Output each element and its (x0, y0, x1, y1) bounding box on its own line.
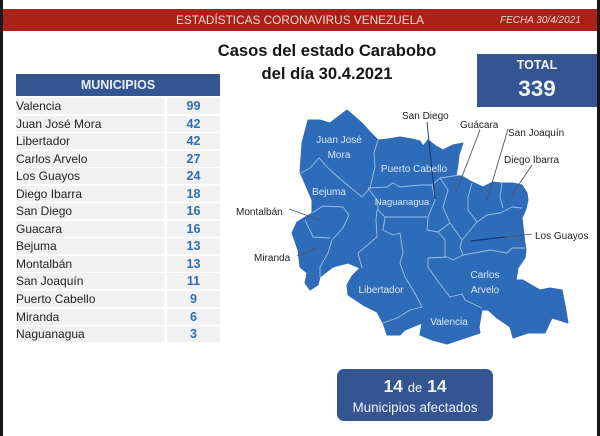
map labels inside (312, 135, 500, 328)
row: Guacara: Guacara (16, 222, 62, 236)
map labels outside: San Diego (402, 111, 449, 122)
row: San Diego: San Diego (16, 204, 72, 218)
row: Valencia: Valencia (16, 99, 61, 113)
row: San Diego: 16 (187, 204, 200, 218)
row: Libertador (16, 133, 220, 149)
row: Puerto Cabello: Puerto Cabello (16, 292, 95, 306)
map labels inside: Libertador (358, 285, 404, 296)
row: Naguanagua: Naguanagua (16, 327, 85, 341)
header title: ESTADÍSTICAS CORONAVIRUS VENEZUELA (176, 13, 424, 27)
row: Diego Ibarra (16, 186, 220, 202)
table heading: MUNICIPIOS (81, 78, 155, 92)
map labels inside: Valencia (430, 317, 468, 328)
map labels outside: San Joaquín (508, 128, 564, 139)
leader lines (289, 122, 532, 256)
row: Valencia: 99 (187, 99, 200, 113)
state silhouette (292, 110, 568, 344)
row: Juan José Mora: Juan José Mora (16, 116, 101, 130)
callout count: 14 de 14 (383, 376, 447, 396)
row: Carlos Arvelo (16, 151, 220, 167)
row: Valencia (16, 98, 220, 114)
row: Naguanagua: 3 (190, 327, 197, 341)
row: San Joaquín: 11 (187, 274, 200, 288)
map labels outside: Guácara (460, 120, 499, 131)
row: Diego Ibarra: Diego Ibarra (16, 187, 82, 201)
municipal borders (301, 140, 525, 323)
map labels inside: Bejuma (312, 187, 346, 198)
map labels inside: Naguanagua (375, 197, 430, 208)
total label: TOTAL (517, 58, 557, 72)
row: Puerto Cabello: 9 (190, 292, 197, 306)
row: Guacara: 16 (187, 222, 200, 236)
row: Libertador: 42 (187, 134, 200, 148)
row: Miranda: Miranda (16, 310, 59, 324)
map labels inside: Carlos (471, 270, 499, 281)
row: Guacara (16, 221, 220, 237)
row: Montalbán (16, 256, 220, 272)
Los Guayos pointer (471, 237, 505, 241)
map labels outside: Diego Ibarra (504, 155, 559, 166)
row: Diego Ibarra: 18 (187, 187, 200, 201)
row: Bejuma: Bejuma (16, 239, 57, 253)
title: del día 30.4.2021 (262, 64, 392, 83)
row: Carlos Arvelo: Carlos Arvelo (16, 152, 87, 166)
map labels inside: Mora (328, 150, 351, 161)
row: San Joaquín (16, 273, 220, 289)
map labels outside: Los Guayos (535, 231, 588, 242)
row: Puerto Cabello (16, 291, 220, 307)
map labels outside (236, 111, 588, 264)
row: Montalbán: 13 (187, 257, 200, 271)
row: Miranda: 6 (190, 310, 197, 324)
row: Naguanagua (16, 326, 220, 342)
map labels inside: Juan José (316, 135, 362, 146)
row: Juan José Mora: 42 (187, 116, 200, 130)
map labels inside: Arvelo (471, 285, 500, 296)
map labels outside: Montalbán (236, 207, 283, 218)
total box (477, 54, 597, 107)
row: Carlos Arvelo: 27 (187, 152, 200, 166)
row: San Joaquín: San Joaquín (16, 274, 83, 288)
callout caption: Municipios afectados (352, 400, 478, 415)
row: San Diego (16, 203, 220, 219)
header date: FECHA 30/4/2021 (500, 15, 581, 26)
row: Libertador: Libertador (16, 134, 70, 148)
table heading (16, 74, 220, 96)
title (218, 41, 436, 83)
title: Casos del estado Carabobo (218, 41, 436, 60)
row: Montalbán: Montalbán (16, 257, 72, 271)
row: Bejuma: 13 (187, 239, 200, 253)
row: Los Guayos: 24 (187, 169, 200, 183)
row: Miranda (16, 309, 220, 325)
row: Juan José Mora (16, 116, 220, 132)
left screen edge (0, 0, 3, 436)
row: Los Guayos (16, 168, 220, 184)
callout: municipalities affected (337, 369, 493, 421)
header bar (3, 9, 597, 31)
map labels inside: Puerto Cabello (381, 164, 448, 175)
map labels outside: Miranda (254, 253, 291, 264)
right screen edge (597, 0, 600, 436)
row: Bejuma (16, 238, 220, 254)
total value: 339 (518, 76, 556, 101)
row: Los Guayos: Los Guayos (16, 169, 80, 183)
